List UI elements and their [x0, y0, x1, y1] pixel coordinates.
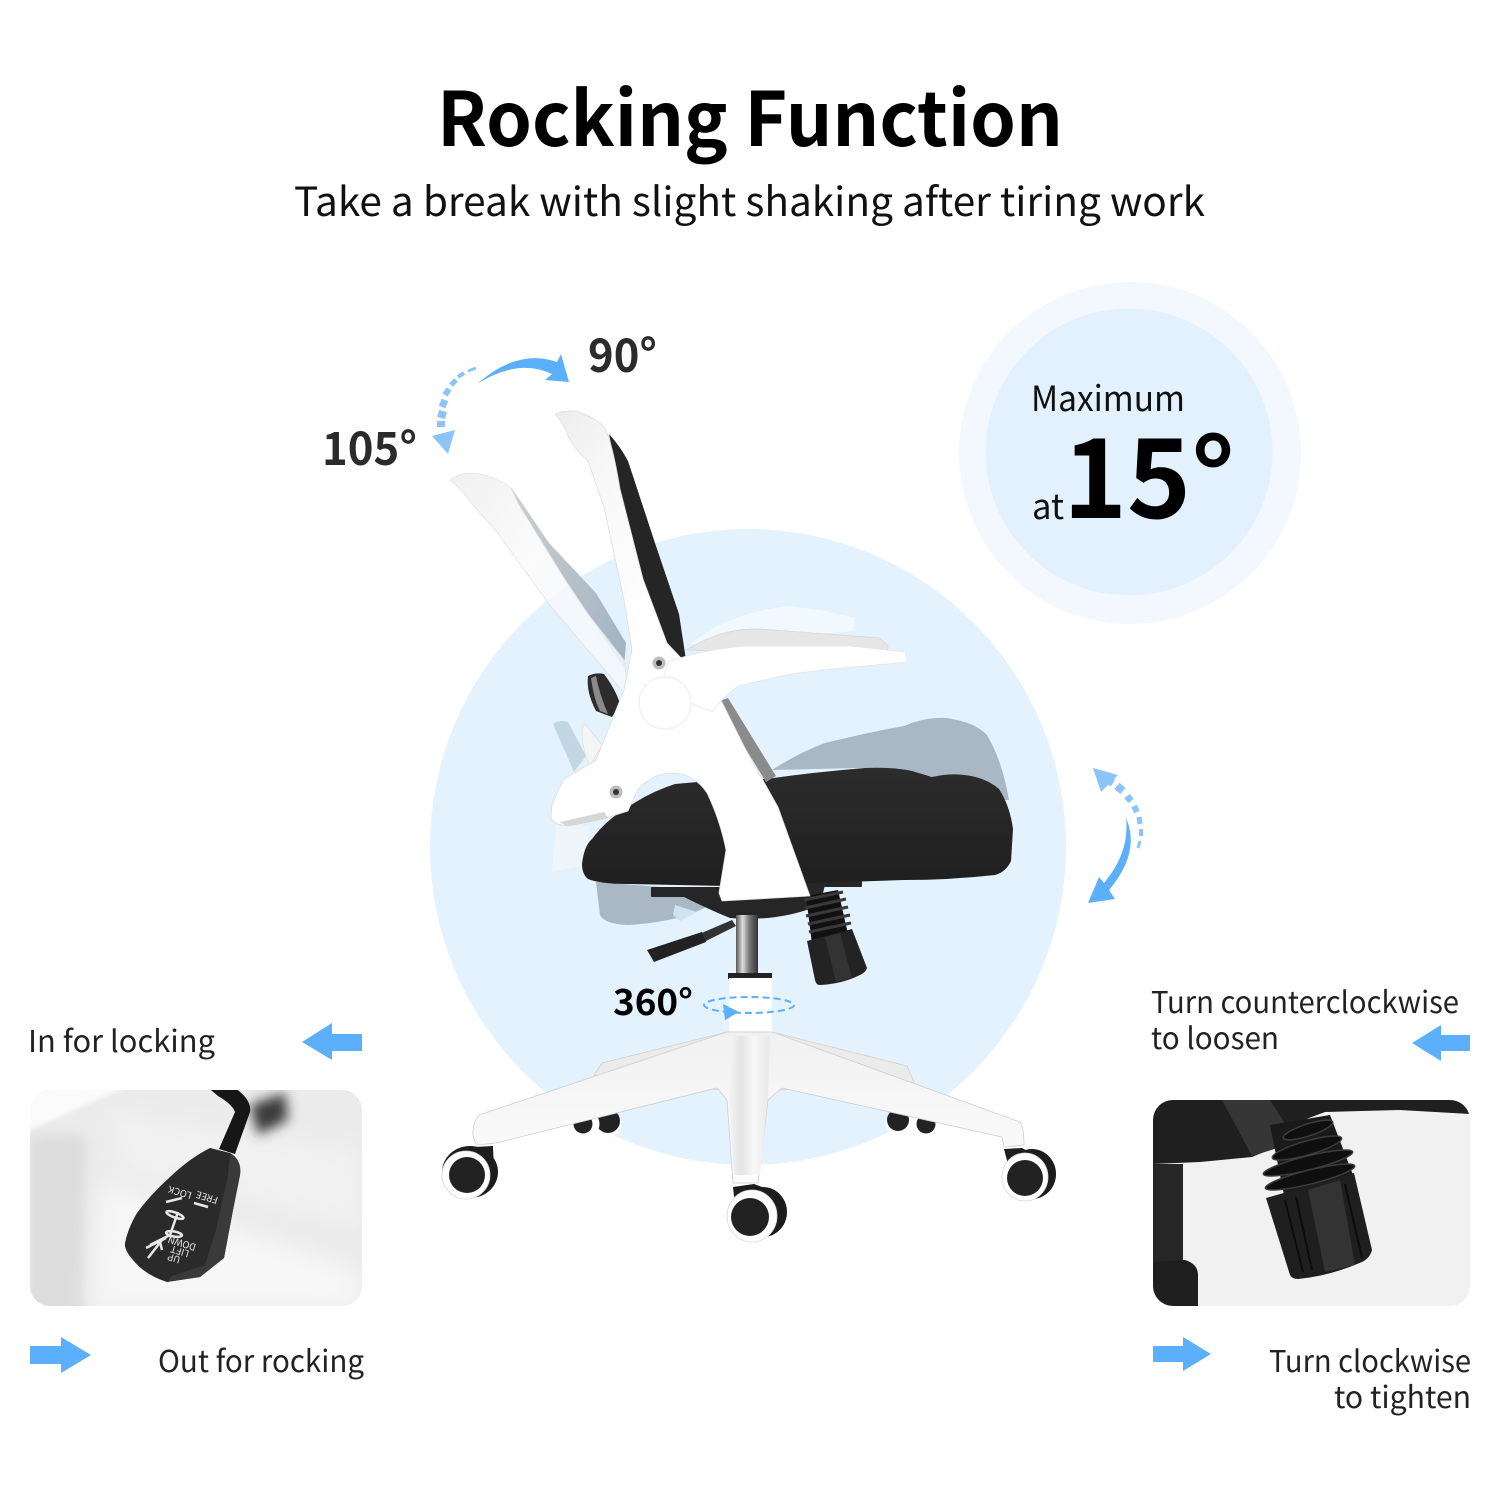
text: turn counterclockwise to loosen — [1151, 978, 1459, 1058]
ghost arm rests — [687, 606, 888, 658]
pivot cap — [639, 677, 691, 729]
chair base — [442, 973, 1056, 1242]
column foot — [1153, 1260, 1198, 1306]
callout: maximum 15 degrees: Maximum — [1031, 371, 1185, 422]
bolt lower — [610, 786, 622, 798]
title: Rocking Function — [437, 59, 1063, 168]
black seat cushion — [582, 768, 1013, 886]
arrow: right rocking — [30, 1337, 91, 1373]
text: out for rocking: Out for rocking — [158, 1337, 364, 1381]
hub shading — [729, 1036, 770, 1175]
seat underside — [1153, 1100, 1470, 1164]
arrow: left loosen — [1412, 1025, 1470, 1061]
lower hinge bottom — [560, 812, 608, 826]
text: turn clockwise to tighten: to tighten — [1334, 1373, 1471, 1417]
paddle text: DOWN — [166, 1233, 197, 1255]
text: turn counterclockwise to loosen: Turn counterclockwise — [1151, 978, 1459, 1022]
label: 360 degrees: 360° — [613, 974, 693, 1026]
paddle text: FREE — [194, 1188, 219, 1208]
paddle text — [168, 1186, 218, 1264]
base legs — [473, 1032, 1024, 1183]
backrest headrest lens — [588, 673, 620, 717]
white column — [729, 978, 772, 1034]
ghost backrest at 105 degrees — [450, 473, 630, 700]
column collar — [728, 973, 772, 979]
front wheel — [727, 1184, 787, 1242]
rear base plate — [594, 1032, 914, 1090]
chrome gas lift — [736, 915, 758, 975]
chair illustration — [450, 411, 1013, 985]
under-seat mechanism — [651, 878, 862, 919]
arrow: backrest solid curve — [477, 354, 569, 384]
text: turn clockwise to tighten: Turn clockwise — [1269, 1337, 1471, 1381]
bolt upper — [652, 656, 666, 670]
lever tube — [211, 1090, 250, 1154]
label: 90 degrees: 90° — [588, 320, 657, 386]
rear wheel right — [886, 1109, 938, 1138]
ghost lower frame — [673, 905, 697, 921]
rear wheel left — [572, 1109, 621, 1138]
thread — [1270, 1115, 1352, 1193]
subtitle: Take a break with slight shaking after tiring work — [294, 170, 1205, 228]
arrow: seat solid curve — [1088, 818, 1131, 903]
ghost headrest hinge — [553, 721, 586, 772]
right wheel — [1002, 1148, 1056, 1201]
background circle behind chair — [430, 529, 1066, 1165]
white frame — [551, 411, 810, 901]
arrow: 360 rotation — [704, 997, 794, 1020]
callout: maximum 15 degrees: at — [1032, 479, 1064, 530]
column stem — [1153, 1164, 1183, 1264]
paddle text: UP — [166, 1250, 182, 1268]
arrow: seat dashed curve — [1093, 768, 1141, 848]
arrow: left locking — [302, 1023, 362, 1060]
callout: maximum 15 degrees — [959, 282, 1301, 624]
lens highlight — [591, 676, 608, 714]
arm rest — [660, 646, 908, 712]
rear strut — [717, 698, 776, 782]
adjustment spring and knob — [804, 890, 867, 985]
text: in for locking: In for locking — [28, 1017, 215, 1061]
photo panel: knob — [1153, 1100, 1470, 1306]
arrow: right tighten — [1153, 1337, 1211, 1371]
rear hinge piece — [582, 724, 602, 766]
callout: maximum 15 degrees: 15° — [1063, 390, 1235, 550]
knob — [1266, 1173, 1372, 1279]
height lever — [647, 920, 736, 962]
text: turn counterclockwise to loosen: to loosen — [1151, 1014, 1279, 1058]
paddle text: LIFT — [168, 1242, 191, 1261]
ghost seat lower — [596, 882, 708, 925]
lever paddle — [125, 1148, 240, 1282]
paddle icon — [146, 1198, 208, 1258]
paddle text: LOCK — [165, 1182, 193, 1203]
ghost seat upper — [772, 718, 1009, 800]
mesh backrest — [609, 434, 686, 662]
text: turn clockwise to tighten — [1269, 1337, 1471, 1417]
left wheel — [442, 1146, 498, 1199]
label: 105 degrees: 105° — [322, 413, 417, 479]
photo panel: lever — [20, 1085, 362, 1315]
ghost lower hinge — [552, 826, 590, 872]
arrow: backrest dashed curve — [432, 368, 476, 454]
